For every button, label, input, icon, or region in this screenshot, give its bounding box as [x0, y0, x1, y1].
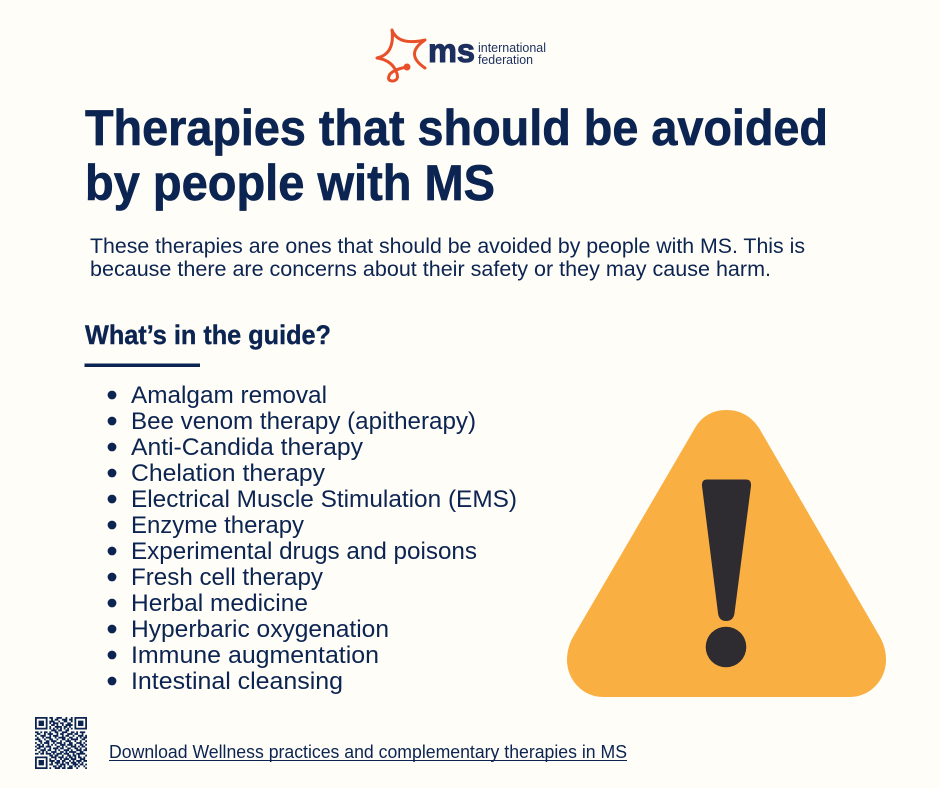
intro text: These therapies are ones that should be avoided by people with MS. This is [90, 234, 805, 258]
title [85, 100, 828, 211]
therapy list: Bee venom therapy (apitherapy) [131, 408, 476, 435]
therapy list: Anti-Candida therapy [131, 434, 363, 461]
therapy list: Electrical Muscle Stimulation (EMS) [131, 486, 517, 513]
logo text: international: international [478, 40, 546, 55]
heading: What's in the guide?: What’s in the guide? [85, 320, 331, 350]
therapy list: Experimental drugs and poisons [131, 538, 477, 565]
therapy list: Amalgam removal [131, 382, 327, 409]
title: by people with MS [85, 155, 495, 211]
logo wordmark: ms: ms [428, 32, 475, 69]
therapy list: Intestinal cleansing [131, 668, 343, 695]
therapy list: Immune augmentation [131, 642, 379, 669]
therapy list: Fresh cell therapy [131, 564, 323, 591]
intro text: because there are concerns about their safety or they may cause harm. [90, 257, 771, 281]
icon: warning triangle [567, 410, 886, 697]
icon: orange star [377, 30, 425, 81]
logo: MS International Federation [377, 30, 546, 81]
title: Therapies that should be avoided [85, 100, 828, 156]
therapy list: Enzyme therapy [131, 512, 304, 539]
therapy list: Chelation therapy [131, 460, 325, 487]
therapy list: Herbal medicine [131, 590, 308, 617]
heading underline [84, 364, 200, 367]
logo text: federation: federation [478, 52, 533, 67]
therapy list [108, 382, 517, 695]
therapy list: Hyperbaric oxygenation [131, 616, 389, 643]
QR code [35, 718, 87, 768]
intro text [90, 234, 805, 281]
download link: Download Wellness practices and complementary therapies in MS [109, 742, 627, 762]
